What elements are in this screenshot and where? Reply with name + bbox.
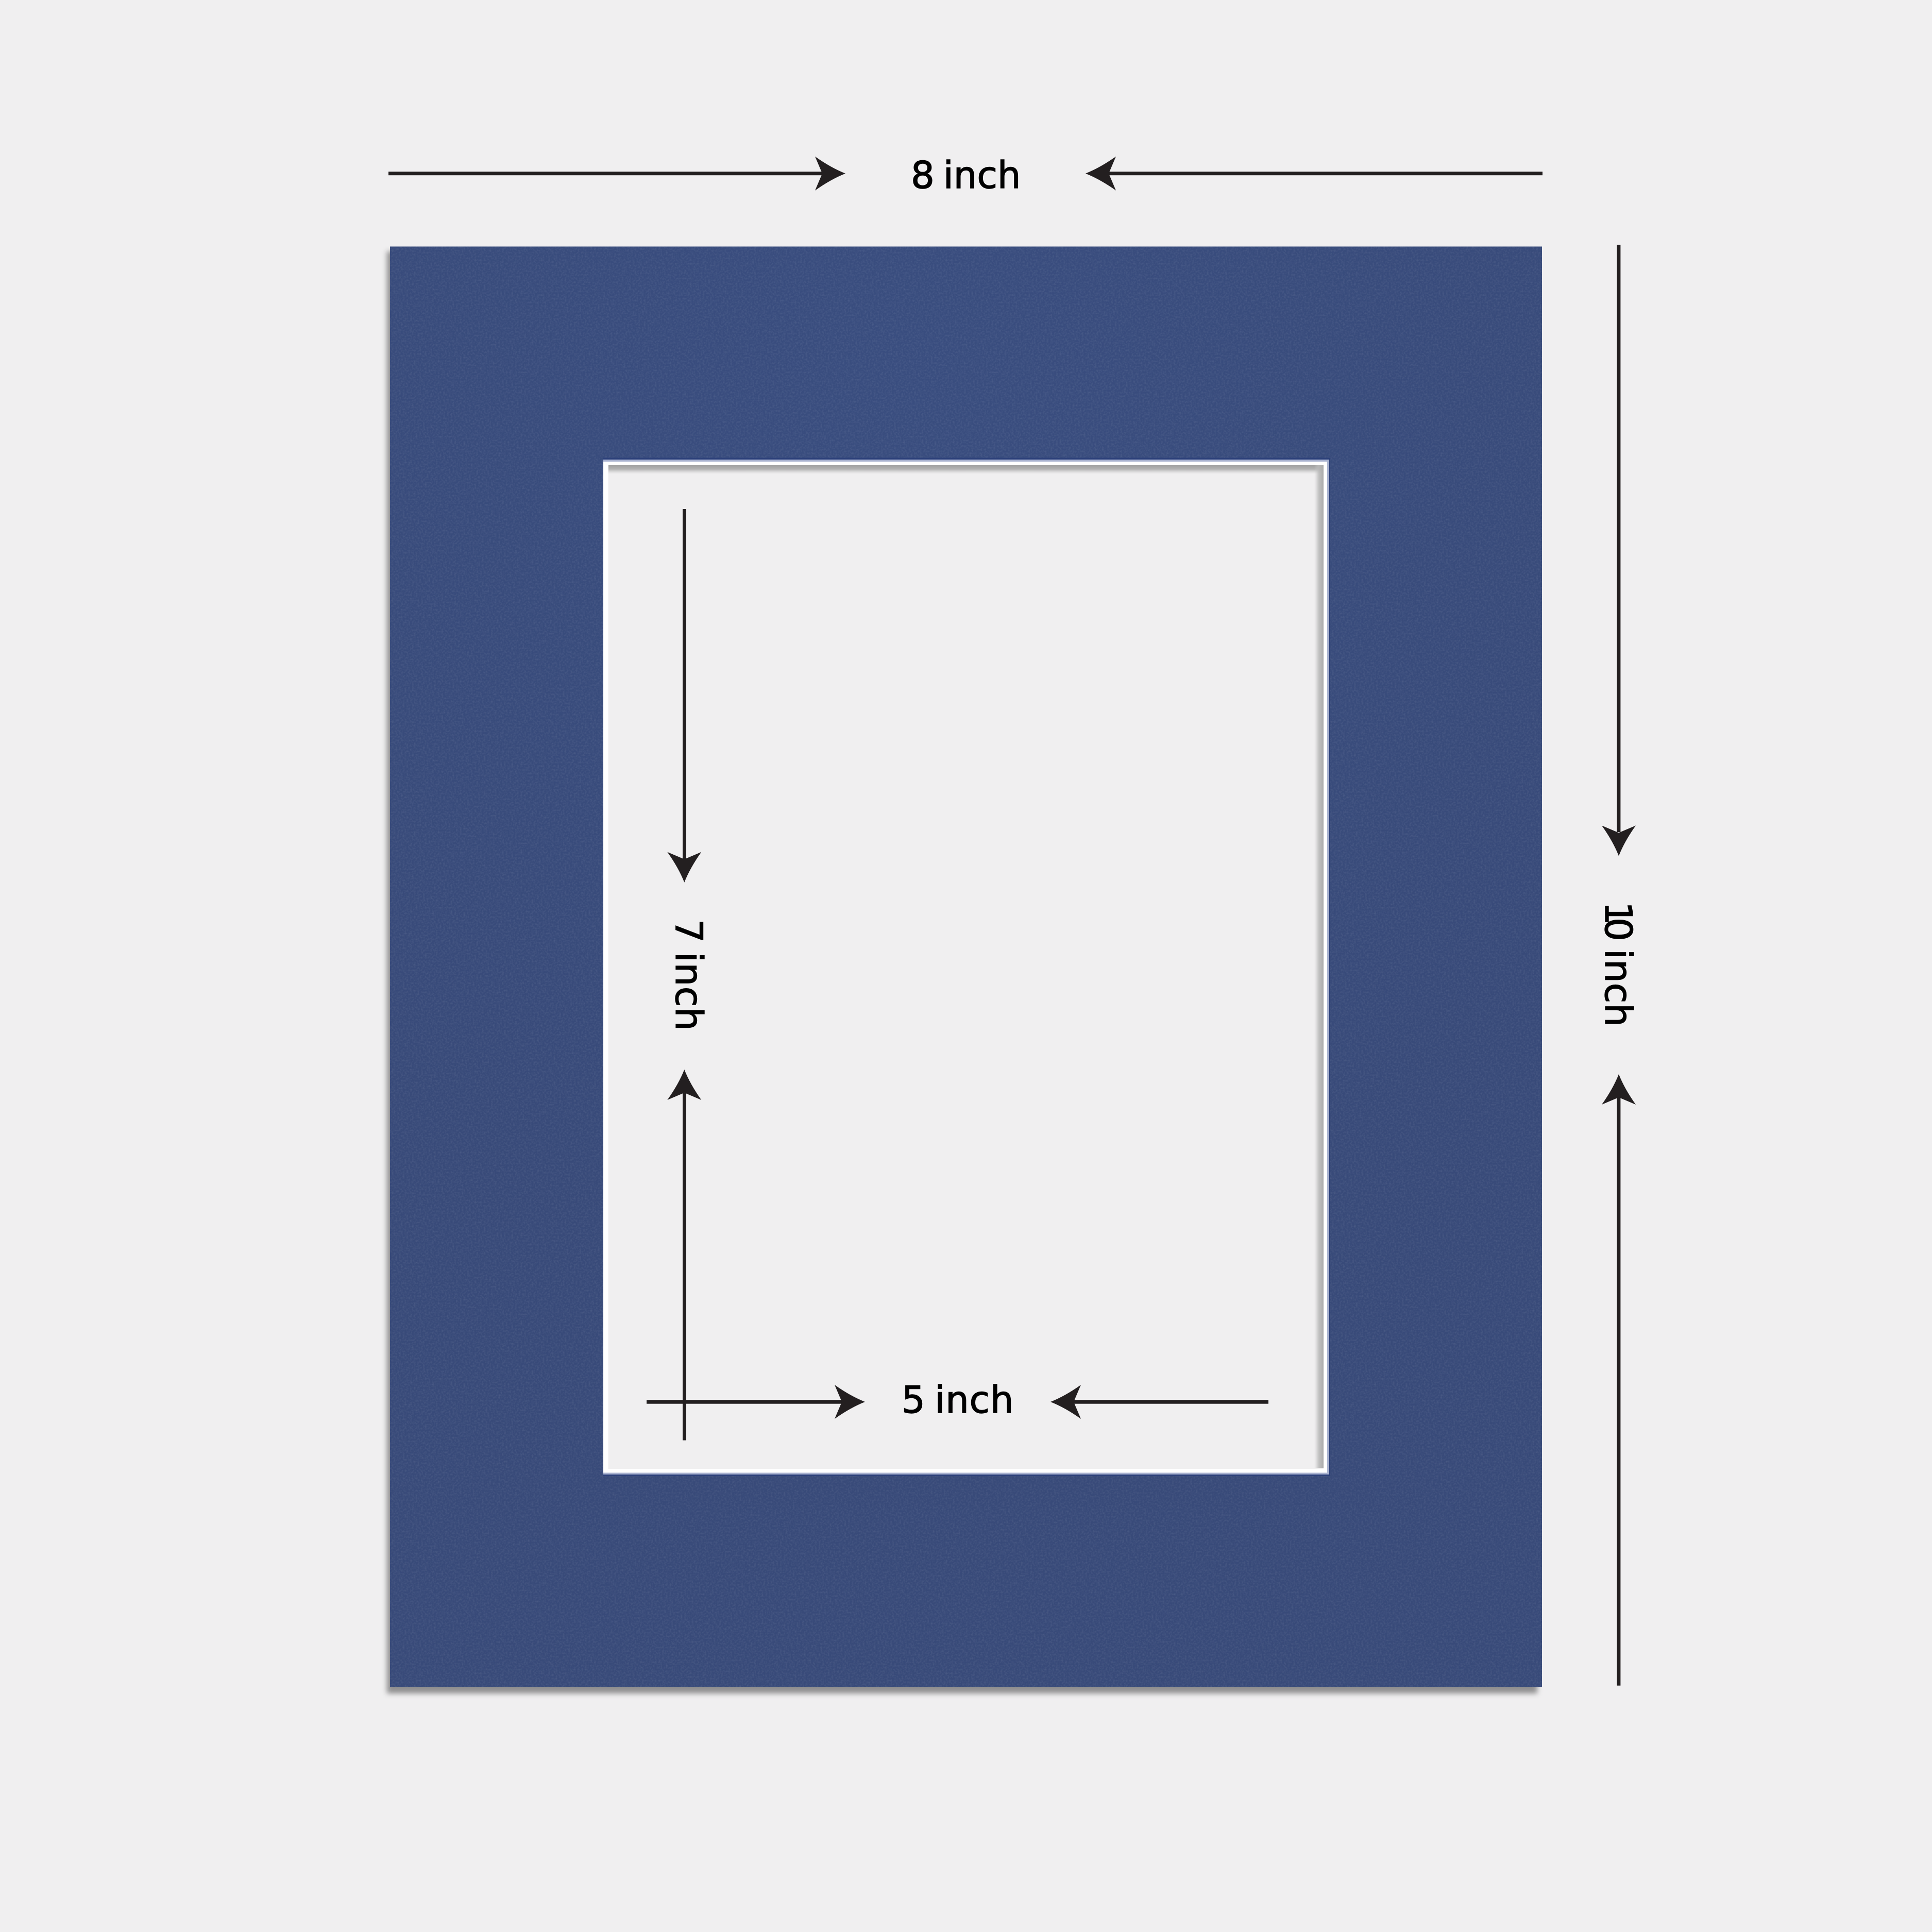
mat surface <box>390 246 1542 1687</box>
arrow: window left <box>647 1385 865 1419</box>
arrow: window down <box>667 509 701 883</box>
dimension: overall height 10 inch <box>1597 245 1640 1686</box>
label: 10 inch: inch <box>1597 949 1640 1027</box>
arrow: window up <box>667 1070 701 1440</box>
dimension: window width 5 inch <box>647 1378 1268 1421</box>
label: 10 inch: 0 <box>1597 918 1640 941</box>
arrow: window right <box>1050 1385 1268 1419</box>
panel: navy mat board <box>387 246 1542 1693</box>
arrow: right down <box>1602 245 1636 856</box>
label: 7 inch: 7 inch <box>667 919 710 1031</box>
label: 8 inch: 8 inch <box>911 154 1021 197</box>
mat drop shadow <box>387 251 1537 1693</box>
dimension: overall width 8 inch <box>388 154 1543 197</box>
arrow: top right <box>1086 157 1543 191</box>
infographic: mat board with dimensions <box>383 157 1636 1697</box>
dimension: window height 7 inch <box>667 509 710 1440</box>
label: 10 inch: 1 <box>1597 902 1640 925</box>
arrow: top left <box>388 157 845 191</box>
cut-out window with bevel <box>603 457 1330 1476</box>
arrow: right up <box>1602 1074 1636 1686</box>
label: 5 inch: 5 inch <box>902 1378 1014 1421</box>
